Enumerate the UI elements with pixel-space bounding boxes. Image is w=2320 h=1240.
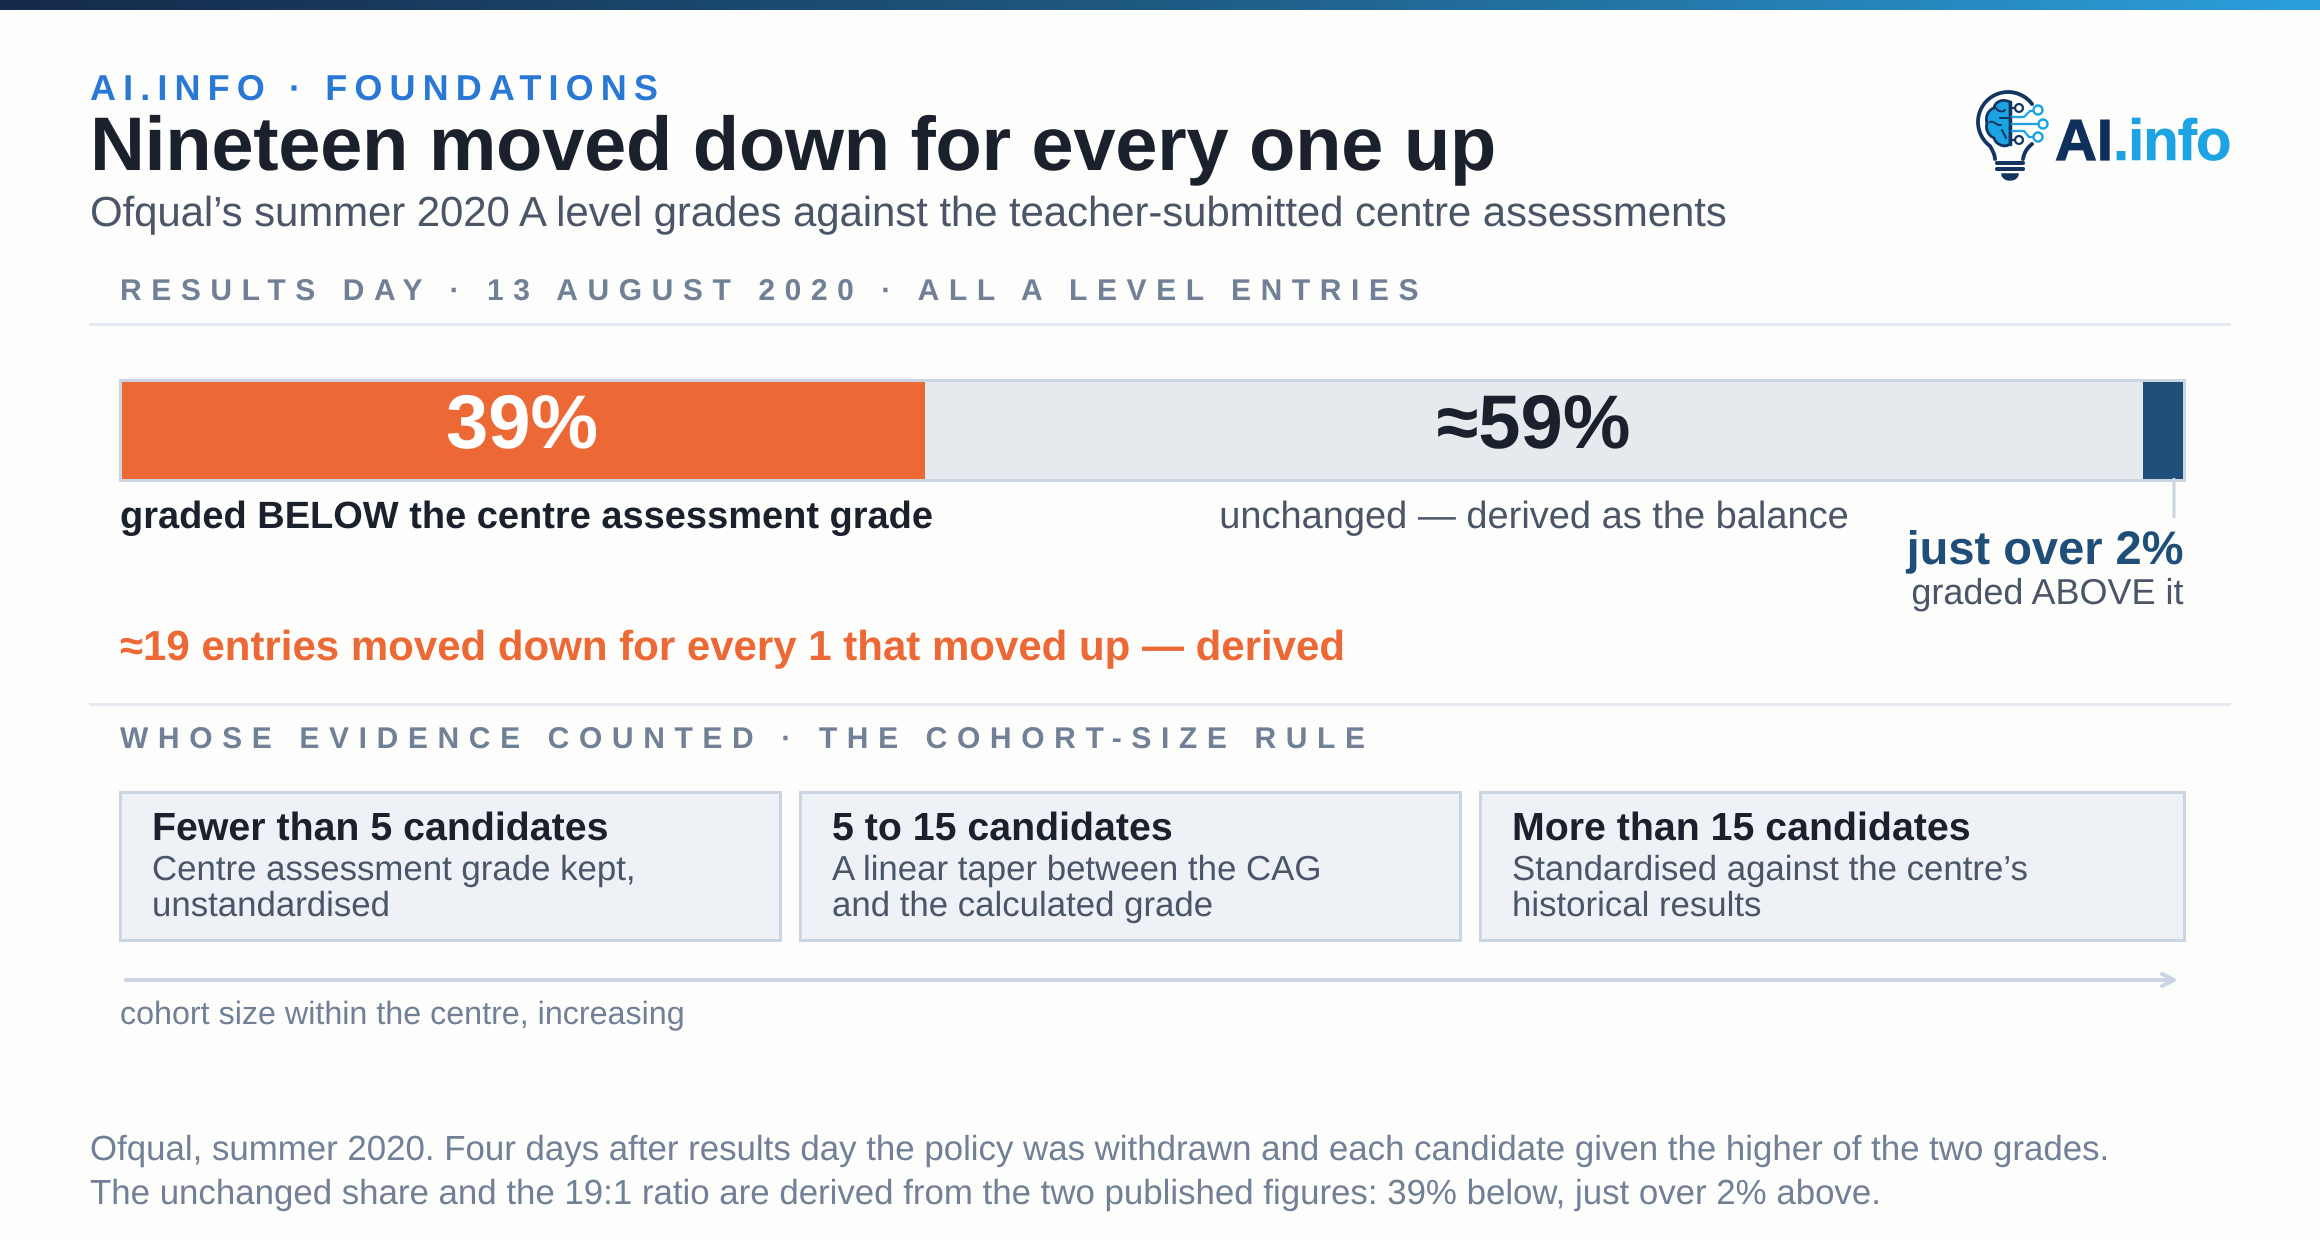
label: below: graded BELOW the centre assessment grade <box>120 495 933 537</box>
card: more than 15: historical results <box>1512 885 1761 924</box>
axis caption: cohort size within the centre, increasing <box>120 995 685 1031</box>
card: 5 to 15: 5 to 15 candidates <box>832 805 1173 849</box>
card: 5 to 15 <box>800 792 1460 940</box>
logo wordmark: AI <box>2055 108 2113 173</box>
stacked bar chart <box>120 380 2184 480</box>
source note: The unchanged share and the 19:1 ratio are derived from the two published figures: 39% below, just over 2% above. <box>90 1173 1881 1212</box>
card: fewer than 5: unstandardised <box>152 885 390 924</box>
ratio callout: ≈19 entries moved down for every 1 that moved up — derived <box>120 622 1345 669</box>
section label: results day: RESULTS DAY · 13 AUGUST 2020 · ALL A LEVEL ENTRIES <box>120 274 1428 307</box>
icon: light bulb with brain and circuit <box>1978 92 2048 180</box>
card: 5 to 15: A linear taper between the CAG <box>832 849 1321 888</box>
label: unchanged: unchanged — derived as the balance <box>1219 495 1849 537</box>
eyebrow: AI.INFO · FOUNDATIONS <box>90 67 665 108</box>
arrow: cohort size increasing <box>126 974 2174 986</box>
title: Nineteen moved down for every one up <box>90 102 1496 187</box>
card: fewer than 5 <box>120 792 780 940</box>
segment: just over 2% above <box>2143 382 2183 479</box>
card: fewer than 5: Centre assessment grade kept, <box>152 849 636 888</box>
section label: whose evidence counted: WHOSE EVIDENCE COUNTED · THE COHORT-SIZE RULE <box>120 722 1375 755</box>
callout: just over 2%: just over 2% <box>1906 521 2184 574</box>
logo wordmark <box>2055 108 2230 173</box>
callout: just over 2% <box>1906 478 2184 612</box>
card: fewer than 5: Fewer than 5 candidates <box>152 805 608 849</box>
segment: 39% below: 39% <box>446 380 598 465</box>
card: more than 15: Standardised against the centre’s <box>1512 849 2028 888</box>
source note <box>90 1129 2109 1212</box>
segment: approx 59% unchanged: ≈59% <box>1437 380 1630 465</box>
source note: Ofqual, summer 2020. Four days after results day the policy was withdrawn and each candidate given the higher of the two grades. <box>90 1129 2109 1168</box>
subtitle: Ofqual’s summer 2020 A level grades against the teacher-submitted centre assessments <box>90 188 1727 235</box>
callout: just over 2%: graded ABOVE it <box>1911 571 2184 612</box>
logo wordmark: .info <box>2113 108 2230 173</box>
segment: 39% below <box>122 380 925 479</box>
card: more than 15: More than 15 candidates <box>1512 805 1971 849</box>
card: more than 15 <box>1480 792 2184 940</box>
logo: AI.info <box>1978 92 2230 180</box>
card: 5 to 15: and the calculated grade <box>832 885 1213 924</box>
top gradient band <box>0 0 2320 10</box>
